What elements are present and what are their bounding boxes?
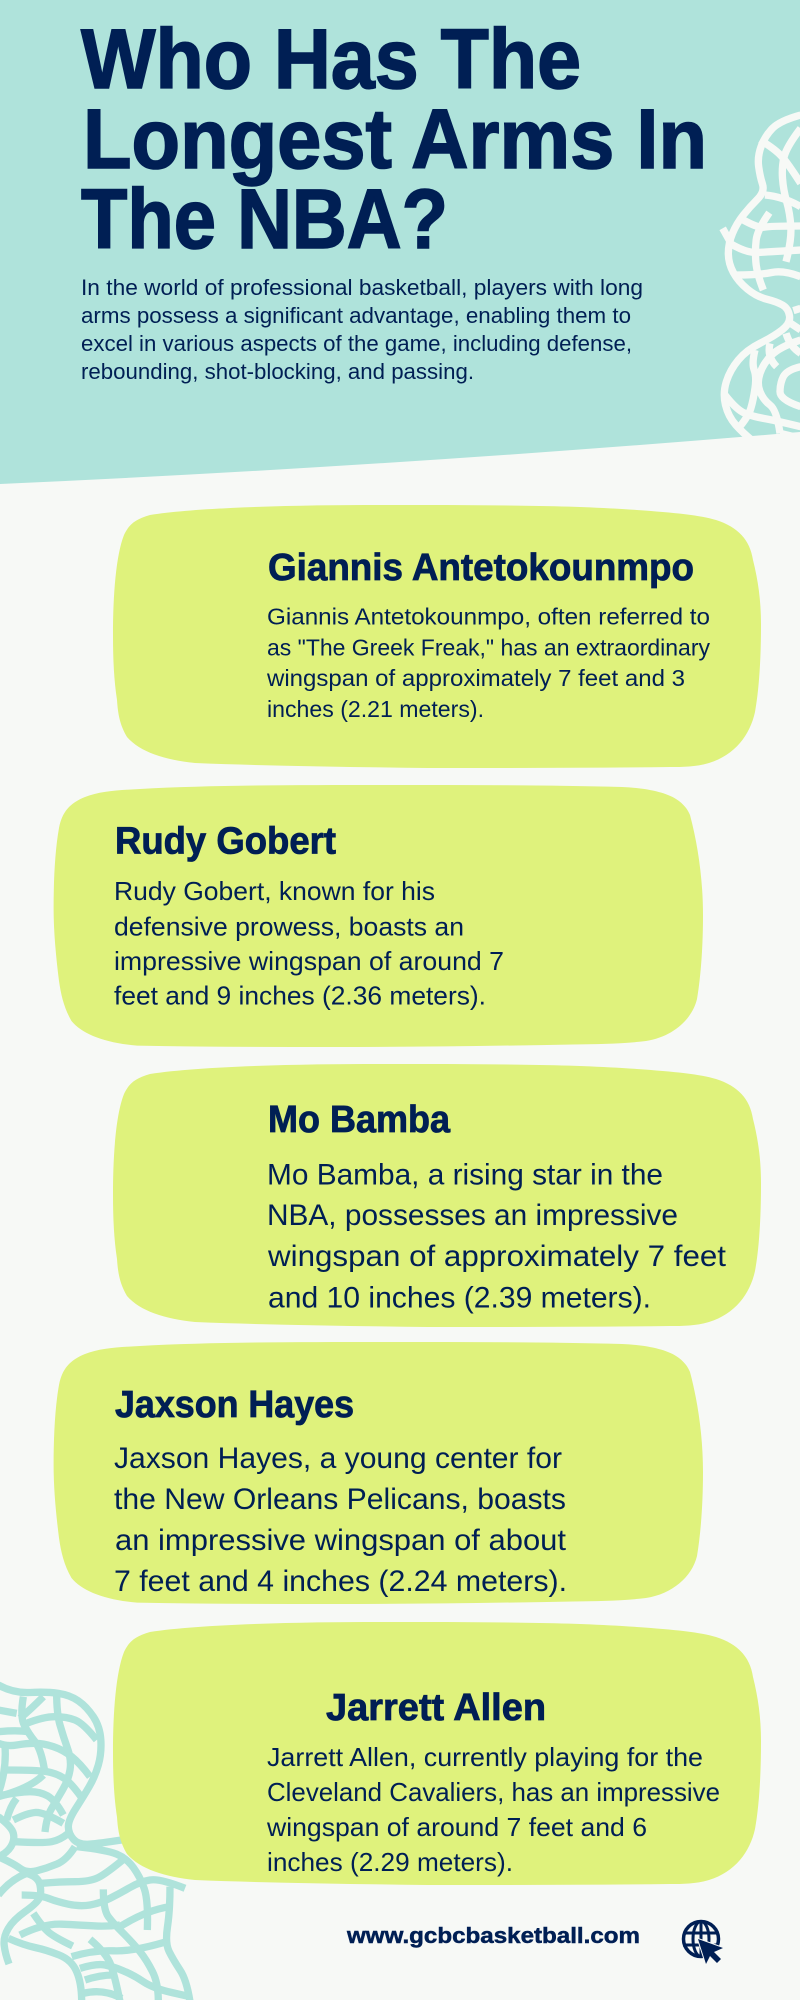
- player description: NBA, possesses an impressive: [267, 1199, 678, 1232]
- blob background: [54, 1342, 703, 1604]
- blob background: [54, 785, 703, 1047]
- player name: Rudy Gobert: [115, 820, 336, 862]
- player description: wingspan of approximately 7 feet and 3: [266, 665, 685, 691]
- intro text block: excel in various aspects of the game, including defense,: [81, 331, 632, 356]
- player description: Mo Bamba, a rising star in the: [267, 1158, 663, 1192]
- player description: feet and 9 inches (2.36 meters).: [114, 980, 486, 1010]
- panel: Jarrett Allen: [113, 1622, 761, 1885]
- player description: [114, 1442, 567, 1598]
- player description: the New Orleans Pelicans, boasts: [114, 1483, 566, 1516]
- title: [81, 12, 707, 266]
- player name: Jaxson Hayes: [115, 1384, 354, 1426]
- panel: Rudy Gobert: [54, 785, 703, 1047]
- panel: Giannis Antetokounmpo: [113, 505, 761, 768]
- website url: www.gcbcbasketball.com: [346, 1923, 640, 1948]
- player name: Giannis Antetokounmpo: [268, 547, 694, 589]
- player description: Cleveland Cavaliers, has an impressive: [267, 1777, 720, 1807]
- player description: as "The Greek Freak," has an extraordinary: [267, 634, 710, 660]
- title: Who Has The: [81, 12, 581, 106]
- panel: Mo Bamba: [113, 1064, 761, 1327]
- player name: Mo Bamba: [268, 1099, 451, 1141]
- player description: 7 feet and 4 inches (2.24 meters).: [114, 1565, 567, 1598]
- intro text block: rebounding, shot-blocking, and passing.: [81, 359, 474, 384]
- icon: mint peanut net decoration: [0, 1685, 190, 2000]
- header background panel: [0, 0, 800, 484]
- player description: wingspan of around 7 feet and 6: [266, 1812, 647, 1842]
- player description: inches (2.21 meters).: [267, 696, 484, 722]
- icon: white peanut net decoration: [723, 115, 800, 440]
- blob background: [113, 505, 761, 768]
- player description: Jaxson Hayes, a young center for: [114, 1442, 562, 1475]
- intro text block: In the world of professional basketball, players with long: [81, 275, 643, 300]
- title: The NBA?: [81, 172, 448, 266]
- player name: Jarrett Allen: [326, 1687, 546, 1729]
- player description: impressive wingspan of around 7: [114, 946, 504, 976]
- player description: an impressive wingspan of about: [115, 1524, 567, 1557]
- intro text block: [81, 275, 643, 384]
- player description: and 10 inches (2.39 meters).: [268, 1282, 651, 1314]
- player description: Jarrett Allen, currently playing for the: [267, 1742, 703, 1772]
- player description: defensive prowess, boasts an: [114, 912, 464, 942]
- player description: Rudy Gobert, known for his: [114, 876, 435, 906]
- intro text block: arms possess a significant advantage, enabling them to: [81, 303, 631, 328]
- player description: [267, 1158, 727, 1314]
- player description: [266, 604, 710, 722]
- icon: globe with cursor: [683, 1921, 723, 1964]
- player description: wingspan of approximately 7 feet: [267, 1240, 727, 1273]
- player description: [266, 1742, 720, 1877]
- player description: inches (2.29 meters).: [267, 1847, 513, 1877]
- blob background: [113, 1064, 761, 1327]
- title: Longest Arms In: [83, 92, 707, 186]
- blob background: [113, 1622, 761, 1885]
- player description: [114, 876, 504, 1010]
- panel: Jaxson Hayes: [54, 1342, 703, 1604]
- player description: Giannis Antetokounmpo, often referred to: [267, 604, 710, 630]
